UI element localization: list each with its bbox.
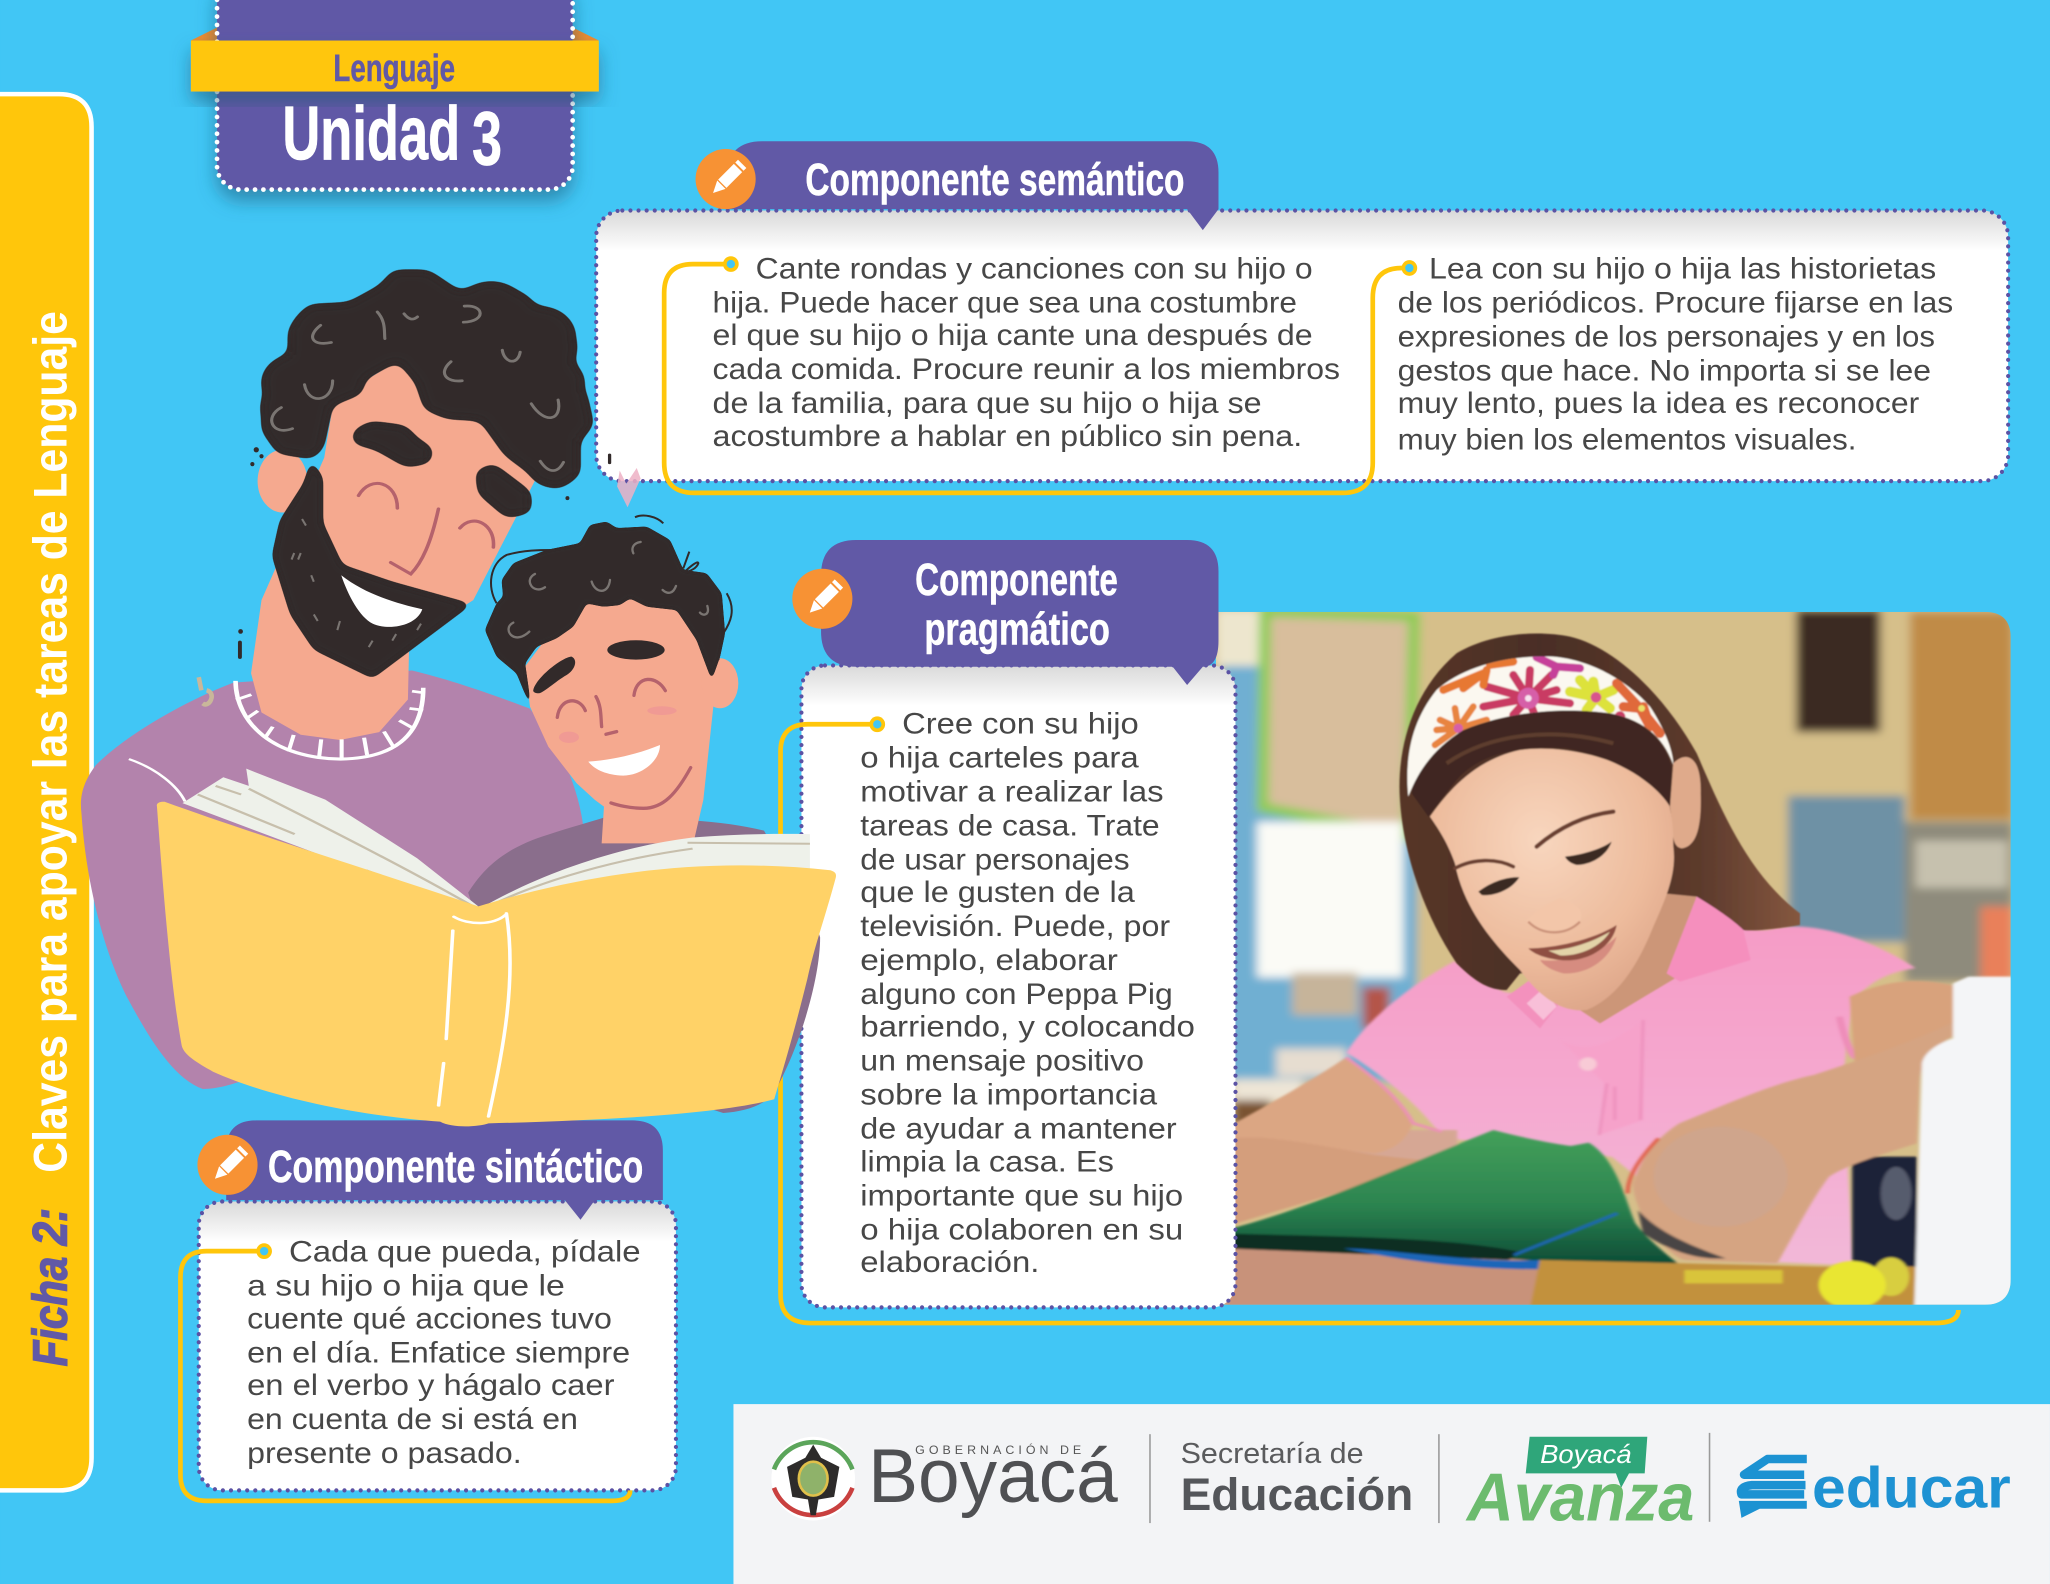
text block [860, 707, 1195, 1279]
face [1430, 749, 1674, 1010]
text block: a su hijo o hija que le [247, 1270, 565, 1303]
text box [596, 210, 2008, 481]
divider [1709, 1433, 1710, 1522]
text: first column [713, 252, 1340, 453]
logo text: Secretaría de Educación [1181, 1438, 1413, 1520]
text block: en cuenta de si está en [247, 1403, 578, 1436]
text block: presente o pasado. [247, 1437, 522, 1470]
unit badge: Lenguaje [333, 48, 455, 90]
desk [1225, 1247, 1550, 1310]
dark chair [1852, 1157, 1917, 1267]
panel: componente pragmático [781, 540, 1958, 1323]
headband [1407, 656, 1673, 797]
text: first column: el que su hijo o hija cante una después de [713, 319, 1313, 352]
panel: componente sintáctico [180, 1120, 676, 1501]
sleeve trim [1346, 1057, 1442, 1132]
girl head [1399, 633, 1800, 1028]
hair back [1399, 633, 1800, 990]
connector line [664, 264, 1409, 493]
side tab: ficha title [0, 94, 92, 1490]
side tab: ficha title: Claves para apoyar las tareas de Lenguaje [24, 311, 77, 1173]
father neck and face [251, 361, 536, 740]
text block: Cada que pueda, pídale [289, 1236, 641, 1269]
heading text: Componente [915, 554, 1118, 605]
logo: educar [1739, 1456, 2011, 1520]
heading text: pragmático [924, 604, 1110, 655]
text: first column: de la familia, para que su hijo o hija se [713, 387, 1262, 420]
collar and open placket [1667, 897, 1751, 982]
headband flowers [1435, 657, 1660, 745]
icon: pencil [792, 569, 852, 629]
ear [1670, 757, 1701, 848]
text block: cuente qué acciones tuvo [247, 1302, 612, 1335]
text: first column: acostumbre a hablar en público sin pena. [713, 420, 1302, 453]
text block [247, 1236, 641, 1470]
eyes [1478, 877, 1519, 895]
photo: girl cutting green paper [1200, 600, 2024, 1317]
mouth [1540, 937, 1617, 973]
green paper [1225, 1130, 1682, 1267]
glue bottle [1914, 977, 2015, 1310]
beard dashes [292, 519, 421, 647]
text block: tareas de casa. Trate [860, 809, 1160, 842]
text block: sobre la importancia [860, 1079, 1157, 1112]
text block: Cree con su hijo [902, 707, 1139, 740]
decorative specks [238, 447, 611, 659]
text: second column: expresiones de los personajes y en los [1398, 320, 1935, 353]
text: second column: Lea con su hijo o hija las historietas [1429, 252, 1936, 285]
bullet dot [869, 716, 885, 732]
text: second column [1398, 252, 1953, 457]
son head [485, 516, 738, 843]
father smile [341, 575, 422, 627]
divider [1149, 1434, 1151, 1523]
father ear [258, 450, 307, 512]
text block: ejemplo, elaborar [860, 944, 1118, 977]
panel: componente semántico [596, 141, 2008, 493]
footer: logos bar [733, 1404, 2050, 1584]
illustration: father and son reading a book [81, 270, 836, 1126]
logo: Gobernación de Boyacá crest [771, 1437, 855, 1520]
neck [1580, 893, 1697, 1023]
text block: importante que su hijo [860, 1179, 1183, 1212]
logo text: Secretaría de Educación: Educación [1181, 1469, 1413, 1520]
unit badge: Unidad [282, 91, 460, 176]
text block: que le gusten de la [860, 876, 1135, 909]
logo: Boyacá Avanza: Boyacá [1540, 1439, 1632, 1469]
photo background room [1200, 600, 2024, 1317]
ruler [1530, 1260, 1917, 1310]
speck: tan dots [199, 677, 212, 704]
text: second column: muy bien los elementos visuales. [1398, 424, 1856, 457]
unit badge [191, 0, 599, 190]
side tab: ficha title: Ficha 2: [24, 1208, 78, 1366]
icon: pencil [696, 149, 756, 209]
icon: pencil [197, 1135, 258, 1195]
hair front [1412, 710, 1672, 817]
text block: de ayudar a mantener [860, 1113, 1177, 1146]
heading text: Componente sintáctico [268, 1141, 643, 1192]
right arm [1850, 981, 1958, 1067]
heart [617, 468, 641, 507]
text: second column: gestos que hace. No importa si se lee [1398, 354, 1931, 387]
bullet dots [723, 256, 1417, 276]
father hair and features [260, 270, 594, 574]
heading text [915, 554, 1118, 655]
father beard [272, 460, 472, 679]
heading text: Componente semántico [805, 154, 1184, 205]
text: second column: muy lento, pues la idea es reconocer [1398, 387, 1919, 420]
heading tab [727, 141, 1218, 230]
brows [1455, 861, 1513, 868]
text block: limpia la casa. Es [860, 1145, 1114, 1178]
bullet dot [256, 1243, 272, 1259]
text box [199, 1201, 676, 1490]
left arm [1225, 1057, 1413, 1153]
unit badge: 3 [472, 97, 502, 182]
text block: o hija colaboren en su [860, 1213, 1183, 1246]
heading tab [821, 540, 1218, 685]
polo shirt [1346, 897, 1916, 1265]
sweater collar [236, 681, 425, 759]
nose [1527, 898, 1581, 933]
text block: en el verbo y hágalo caer [247, 1369, 614, 1402]
divider [1438, 1434, 1440, 1523]
text block: un mensaje positivo [860, 1045, 1144, 1078]
logo text: Secretaría de Educación: Secretaría de [1181, 1438, 1364, 1470]
text block: de usar personajes [860, 843, 1130, 876]
logo text: Gobernación de: GOBERNACIÓN DE [915, 1442, 1081, 1457]
lower body and desk [1225, 977, 2015, 1310]
logo: educar: educar [1812, 1456, 2011, 1520]
text: first column: Cante rondas y canciones con su hijo o [756, 252, 1313, 285]
text block: en el día. Enfatice siempre [247, 1336, 630, 1369]
placket [1560, 1020, 1643, 1135]
heading tab [226, 1120, 663, 1220]
logo text: Boyacá: Boyacá [868, 1434, 1119, 1519]
text: second column: de los periódicos. Procure fijarse en las [1398, 286, 1953, 319]
logo: Boyacá Avanza: Avanza [1465, 1459, 1694, 1535]
text block: motivar a realizar las [860, 775, 1164, 808]
text block: televisión. Puede, por [860, 910, 1170, 943]
connector line [781, 724, 1958, 1323]
text: first column: hija. Puede hacer que sea una costumbre [713, 286, 1297, 319]
text box [801, 665, 1235, 1307]
text block: elaboración. [860, 1246, 1039, 1279]
connector line [180, 1251, 630, 1501]
text block: o hija carteles para [860, 741, 1139, 774]
text block: barriendo, y colocando [860, 1011, 1195, 1044]
open book [157, 769, 836, 1126]
text block: alguno con Peppa Pig [860, 978, 1173, 1011]
father sweater and son shirt [81, 671, 820, 1113]
text: first column: cada comida. Procure reunir a los miembros [713, 353, 1340, 386]
